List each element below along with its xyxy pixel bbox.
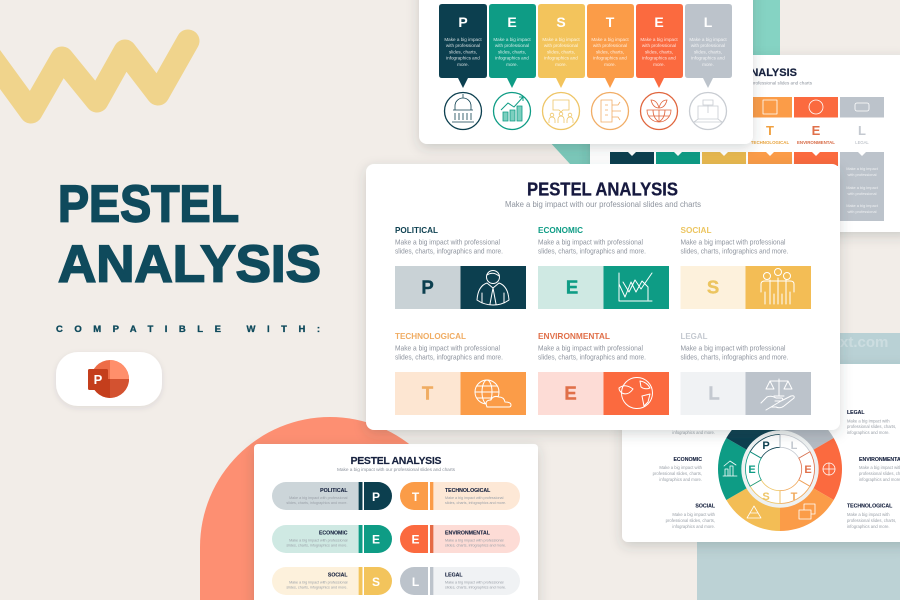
label: social: professional slides, charts, — [666, 518, 715, 523]
pill: political: P — [372, 490, 380, 504]
back slide icon cells — [748, 97, 884, 118]
column: E: Make a big impact — [493, 37, 531, 42]
block: economic: slides, charts, infographics and more. — [538, 248, 646, 256]
back slide coloured columns: Make a big impact — [846, 185, 879, 190]
label: economic — [653, 457, 703, 482]
icon: hand and scales — [761, 379, 794, 410]
main title: PESTEL — [58, 176, 239, 234]
back slide heading: ANALYSIS — [742, 67, 797, 79]
back slide coloured columns: Make a big impact — [846, 166, 879, 171]
block: legal: slides, charts, infographics and more. — [680, 354, 789, 362]
label: social: infographics and more. — [672, 524, 715, 529]
pill: legal: slides, charts, infographics and more. — [445, 586, 506, 590]
back slide letters — [751, 123, 869, 145]
panel: back right slide — [590, 55, 900, 232]
icon: globe and cloud — [475, 380, 511, 407]
blue backdrop blocks — [697, 333, 900, 600]
block: environmental: ENVIRONMENTAL — [538, 331, 610, 341]
block: economic — [538, 225, 669, 309]
label: technological: professional slides, charts, — [847, 518, 896, 523]
column: P: more. — [457, 62, 469, 67]
column: T: more. — [604, 62, 616, 67]
block: technological: T — [422, 382, 434, 404]
back slide coloured columns: Make a big impact — [846, 203, 879, 208]
ring letters: E — [748, 464, 756, 476]
block: environmental: E — [564, 382, 577, 404]
column: E: infographics and — [495, 56, 529, 60]
ring letters: E — [804, 464, 812, 476]
column: P: Make a big impact — [444, 37, 482, 42]
column: L: L — [704, 14, 713, 30]
back slide subtitle: professional slides and charts — [751, 80, 813, 86]
block: legal — [680, 331, 811, 415]
label: legal: LEGAL — [847, 410, 865, 416]
column: E: E — [507, 14, 517, 30]
block: legal: LEGAL — [680, 331, 708, 341]
block: environmental: Make a big impact with professional — [538, 346, 643, 352]
pill: environmental: slides, charts, infographics and more. — [445, 544, 506, 548]
block: political: POLITICAL — [395, 225, 438, 235]
pill: political — [272, 482, 392, 510]
label: environmental — [859, 457, 900, 482]
block: social: SOCIAL — [680, 225, 712, 235]
icon: discussion — [542, 92, 580, 130]
label: economic: infographics and more. — [659, 477, 702, 482]
subtitle: Make a big impact with our professional slides and charts — [505, 200, 701, 209]
block: social: S — [707, 276, 719, 298]
panel: main slide — [366, 164, 840, 430]
column: L: Make a big impact — [689, 37, 727, 42]
column: S: slides, charts, — [547, 50, 575, 54]
bottom slide heading: PESTEL ANALYSIS — [350, 455, 442, 467]
column: E — [636, 4, 683, 88]
column: S: Make a big impact — [542, 37, 580, 42]
column: T: with professional — [593, 43, 627, 48]
label: social: SOCIAL — [695, 504, 716, 510]
back slide coloured columns: with professional — [848, 191, 877, 196]
column: E: more. — [653, 62, 665, 67]
label: economic: Make a big impact with — [659, 465, 703, 470]
label: legal: Make a big impact with — [847, 418, 890, 424]
powerpoint badge: P — [94, 372, 103, 387]
label: social — [666, 504, 716, 529]
icon: growth chart — [494, 92, 530, 130]
icon: line chart — [619, 273, 652, 301]
ring letters: P — [762, 440, 770, 452]
column: L: more. — [702, 62, 714, 67]
back slide coloured columns — [610, 152, 884, 221]
column: E: E — [654, 14, 664, 30]
ring letters — [748, 440, 812, 503]
block: technological: Make a big impact with professional — [395, 346, 500, 352]
ring letters: T — [791, 491, 798, 503]
block: political — [395, 225, 526, 309]
column: S: S — [556, 14, 566, 30]
block: technological — [395, 331, 526, 415]
donut icons — [723, 461, 835, 519]
decorative zigzag — [0, 41, 188, 112]
column: E: with professional — [642, 43, 676, 48]
ring letters: S — [762, 491, 770, 503]
column: E: infographics and — [642, 56, 676, 60]
salmon arch — [200, 417, 460, 600]
pill: environmental — [400, 525, 520, 553]
pill: political: Make a big impact with professional — [289, 496, 348, 500]
column: S: infographics and — [544, 56, 578, 60]
pill: economic: E — [372, 532, 380, 546]
back slide letters: TECHNOLOGICAL — [751, 140, 789, 145]
block: environmental — [538, 331, 669, 415]
pill: technological: TECHNOLOGICAL — [445, 488, 491, 494]
label: technological: TECHNOLOGICAL — [847, 504, 893, 510]
block: legal: L — [708, 382, 720, 404]
column: L: with professional — [691, 43, 725, 48]
label: technological: Make a big impact with — [847, 512, 890, 517]
ring letters: L — [791, 440, 798, 452]
icon: earth and leaf — [619, 378, 652, 408]
column: P: slides, charts, — [449, 50, 477, 54]
column: S — [538, 4, 585, 88]
block: technological: TECHNOLOGICAL — [395, 331, 466, 341]
pill: technological: slides, charts, infographics and more. — [445, 501, 506, 505]
panel: bottom left slide — [254, 444, 538, 600]
pill: technological — [400, 482, 520, 510]
label: economic: ECONOMIC — [673, 457, 702, 463]
pill: environmental: E — [411, 532, 420, 546]
column: E: Make a big impact — [640, 37, 678, 42]
label: economic: professional slides, charts, — [653, 471, 702, 476]
pill: environmental: Make a big impact with professional — [445, 538, 504, 542]
block: economic: ECONOMIC — [538, 225, 583, 235]
icon: laptop gavel — [690, 92, 726, 130]
icon: capitol — [444, 92, 482, 130]
panel: top slide — [419, 0, 753, 144]
pill: technological: T — [412, 490, 420, 504]
column: T: T — [606, 14, 615, 30]
panel: bottom right slide — [622, 364, 900, 542]
segment outlines — [745, 434, 815, 504]
column: P — [439, 4, 487, 88]
pill: technological: Make a big impact with professional — [445, 496, 504, 500]
back slide letters: L — [858, 123, 866, 138]
label: political: infographics and more. — [672, 430, 715, 435]
pill: economic: ECONOMIC — [319, 530, 348, 536]
block: economic: Make a big impact with professional — [538, 240, 643, 246]
block: political: slides, charts, infographics and more. — [395, 248, 503, 256]
pill: social — [272, 567, 392, 595]
back slide letters: LEGAL — [855, 140, 869, 145]
column: L — [685, 4, 732, 88]
block: social — [680, 225, 811, 309]
column: T: Make a big impact — [591, 37, 629, 42]
teal backdrop shape — [548, 0, 780, 164]
main title — [58, 176, 321, 294]
pill: social: Make a big impact with professional — [289, 580, 348, 584]
pill: economic: slides, charts, infographics and more. — [286, 544, 348, 548]
block: environmental: slides, charts, infographics and more. — [538, 354, 646, 362]
pill: political: slides, charts, infographics and more. — [286, 501, 348, 505]
icon: plant globe — [640, 92, 678, 130]
label: legal: infographics and more. — [847, 430, 890, 435]
pill: legal: LEGAL — [445, 572, 463, 578]
block: political: P — [421, 276, 434, 298]
back slide coloured columns: with professional — [848, 209, 877, 214]
powerpoint badge — [56, 352, 162, 406]
block: economic: E — [566, 276, 578, 298]
pill: economic: Make a big impact with professional — [289, 538, 348, 542]
pill: legal — [400, 567, 520, 595]
column: P: P — [458, 14, 468, 30]
pill: social: SOCIAL — [328, 572, 348, 578]
label: social: Make a big impact with — [672, 512, 716, 517]
column: L: infographics and — [691, 56, 725, 60]
icon: businessman — [477, 270, 509, 305]
column: T — [587, 4, 634, 88]
back slide letters: E — [812, 123, 821, 138]
block: legal: Make a big impact with professional — [680, 346, 786, 352]
back slide letters: ENVIRONMENTAL — [797, 140, 835, 145]
pill: political: POLITICAL — [320, 488, 348, 494]
donut chart — [718, 407, 842, 531]
icon: people — [761, 268, 794, 304]
block: social: slides, charts, infographics and more. — [680, 248, 789, 256]
bottom slide subtitle: Make a big impact with our professional slides and charts — [337, 467, 456, 473]
pill: social: slides, charts, infographics and more. — [286, 586, 348, 590]
column: S: with professional — [544, 43, 578, 48]
label: technological: infographics and more. — [847, 524, 890, 529]
column: E: with professional — [495, 43, 529, 48]
column: L: slides, charts, — [694, 50, 722, 54]
column: E: more. — [506, 62, 518, 67]
pill: economic — [272, 525, 392, 553]
pill: legal: L — [412, 575, 419, 589]
block: social: Make a big impact with professional — [680, 240, 786, 246]
block: technological: slides, charts, infographics and more. — [395, 354, 503, 362]
column: E — [489, 4, 536, 88]
main title: ANALYSIS — [58, 236, 321, 294]
column: P: infographics and — [446, 56, 480, 60]
compatible with label: COMPATIBLE WITH: — [56, 324, 320, 335]
pill: legal: Make a big impact with professional — [445, 580, 504, 584]
column: T: infographics and — [593, 56, 627, 60]
icon: phone network — [592, 92, 628, 130]
column: T: slides, charts, — [596, 50, 624, 54]
block: political: Make a big impact with professional — [395, 240, 500, 246]
back slide letters: T — [766, 123, 774, 138]
column: E: slides, charts, — [498, 50, 526, 54]
column: P: with professional — [446, 43, 480, 48]
pill: social: S — [372, 575, 380, 589]
back slide coloured columns: with professional — [848, 172, 877, 177]
column: S: more. — [555, 62, 567, 67]
heading: PESTEL ANALYSIS — [527, 180, 678, 200]
pill: environmental: ENVIRONMENTAL — [445, 530, 491, 536]
watermark text: xt.com — [840, 334, 888, 351]
column: E: slides, charts, — [645, 50, 673, 54]
label: legal: professional slides, charts, — [847, 424, 896, 429]
label: technological — [847, 504, 896, 529]
label: legal — [847, 410, 896, 435]
